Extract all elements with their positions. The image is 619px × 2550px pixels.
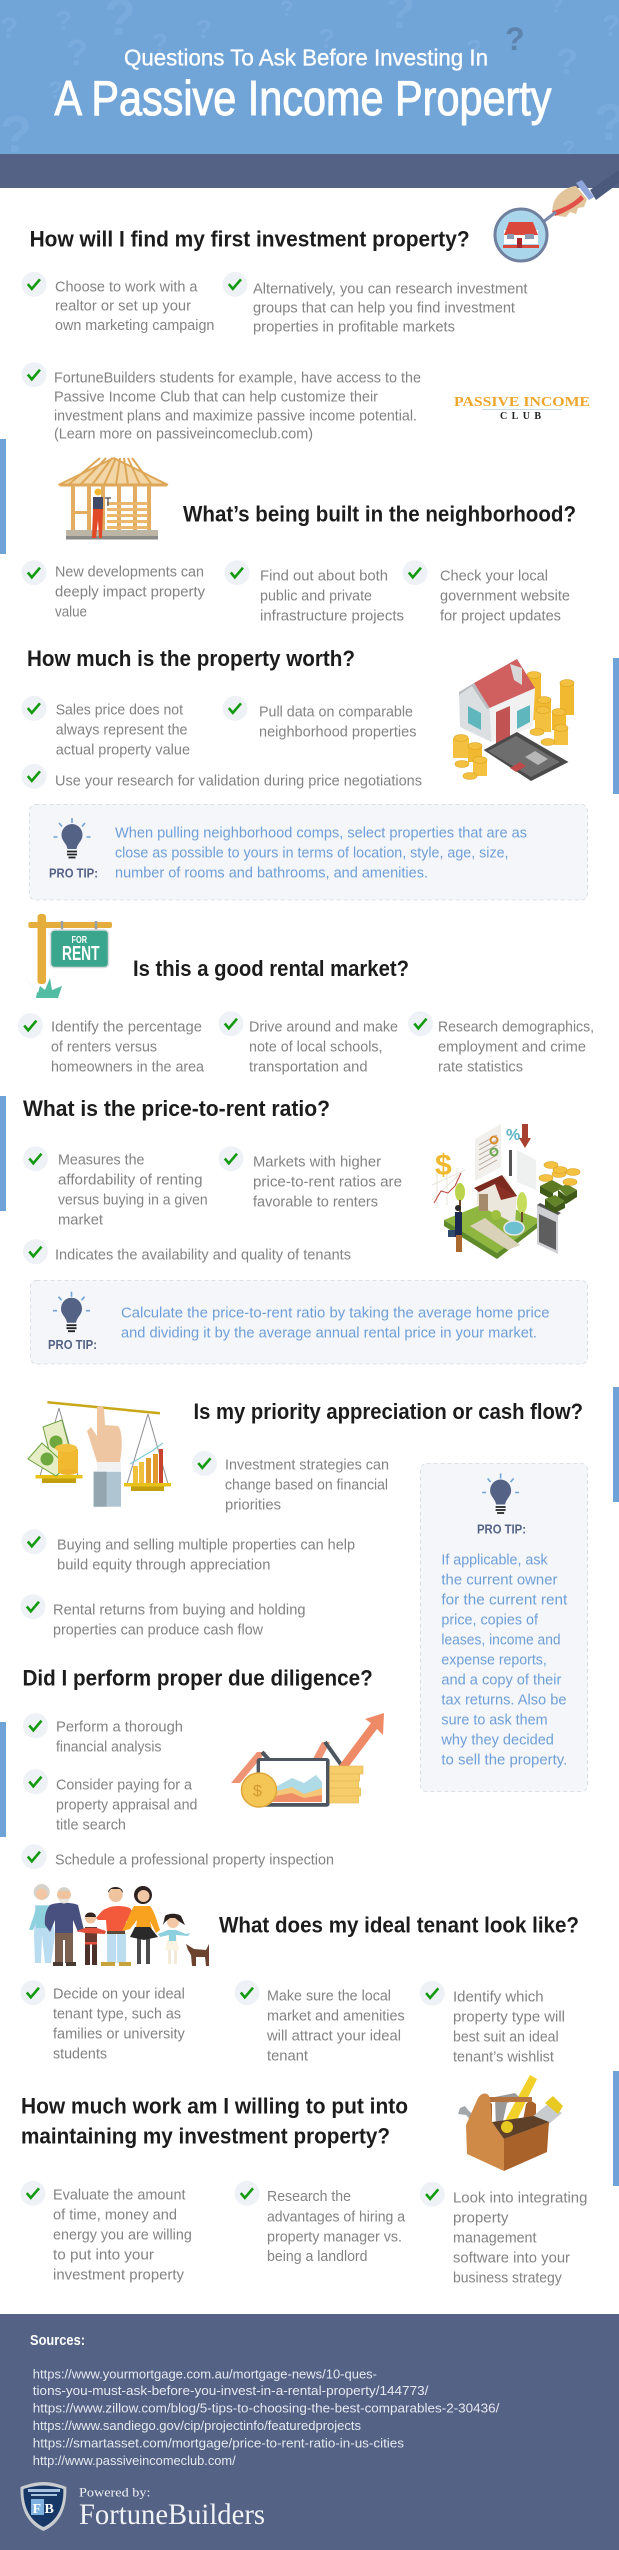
source links: https://www.yourmortgage.com.au/mortgage-news/10-ques- <box>33 2366 377 2381</box>
item: higher ratios: price-to-rent ratios are <box>253 1173 402 1190</box>
item: property manager: Research the <box>267 2188 351 2205</box>
item: strategies: priorities <box>225 1496 281 1513</box>
item: measures: Measures the <box>58 1151 144 1168</box>
title line 1: Questions To Ask Before Investing In <box>124 45 488 71</box>
item: tenant type: Decide on your ideal <box>53 1985 185 2002</box>
item: developments: New developments can <box>55 564 204 581</box>
background question marks: ? <box>152 28 168 58</box>
item: realtor: realtor or set up your <box>55 298 191 315</box>
logo: FortuneBuilders shield: F <box>32 2502 41 2517</box>
item: appraisal: title search <box>56 1816 126 1833</box>
item: financial analysis <box>23 1713 183 1755</box>
item: higher ratios <box>218 1146 402 1210</box>
logo: FortuneBuilders shield <box>20 2482 66 2531</box>
section: rental market <box>18 914 594 1076</box>
icon: scale with hand, money and chart <box>28 1402 171 1507</box>
footer panel <box>0 2314 619 2550</box>
item: property type: tenant’s wishlist <box>453 2048 555 2065</box>
icon: magnifier with hand and house <box>495 170 619 261</box>
icon: bulb <box>53 1292 90 1331</box>
icon: bulb <box>54 818 90 858</box>
item: local market <box>234 1980 405 2064</box>
background question marks: ? <box>55 5 72 36</box>
item: measures <box>23 1146 208 1228</box>
item: financial analysis: financial analysis <box>56 1738 162 1755</box>
item: measures: versus buying in a given <box>58 1191 208 1208</box>
item: demographics <box>408 1011 594 1076</box>
item: financial analysis: Perform a thorough <box>56 1718 183 1735</box>
section: property worth <box>22 646 588 900</box>
item: sales price: actual property value <box>56 742 190 759</box>
side accent bars <box>0 439 619 2186</box>
label: PRO TIP: <box>477 1521 526 1536</box>
panel: pro tip ratio <box>30 1280 588 1364</box>
item: demographics: employment and crime <box>438 1039 586 1056</box>
item: sales price <box>22 696 190 759</box>
icon: for rent sign <box>23 914 112 998</box>
item: investment groups: properties in profitable markets <box>253 319 455 336</box>
item: investment groups <box>222 272 528 336</box>
heading: What is the price-to-rent ratio? <box>23 1096 330 1121</box>
icon: house under construction <box>58 458 168 540</box>
section: ideal tenant <box>20 1884 579 2065</box>
heading: How much work am I willing to put into <box>21 2093 408 2118</box>
tip text: sure to ask them <box>441 1711 548 1728</box>
logo: Passive Income Club <box>454 394 590 422</box>
tip text: price, copies of <box>441 1611 539 1628</box>
item: tenant type <box>20 1980 185 2062</box>
item: renters percent <box>18 1013 205 1076</box>
heading: Did I perform proper due diligence? <box>22 1666 373 1691</box>
item: software: business strategy <box>453 2269 562 2286</box>
section: maintenance work <box>20 2075 587 2286</box>
item: property type <box>420 1981 565 2065</box>
item: buying and selling <box>22 1529 355 1573</box>
source links: https://www.zillow.com/blog/5-tips-to-choosing-the-best-comparables-2-30436/ <box>33 2401 500 2416</box>
icon: for rent sign: FOR <box>72 935 88 946</box>
background question marks: ? <box>318 23 335 54</box>
item: local market: tenant <box>267 2047 309 2064</box>
item: sales price: Sales price does not <box>56 701 184 718</box>
item: property manager: being a landlord <box>267 2248 368 2265</box>
item: local government <box>402 560 570 624</box>
item: time and money <box>20 2181 192 2283</box>
item: buying and selling: Buying and selling multiple properties can help <box>57 1536 355 1553</box>
item: realtor: own marketing campaign <box>55 317 214 334</box>
item: FortuneBuilders students: Passive Income Club that can help customize their <box>54 388 378 405</box>
item: drive around <box>218 1011 398 1076</box>
heading <box>21 2093 408 2148</box>
item: tenant type: students <box>53 2045 107 2062</box>
tip text <box>121 1304 550 1341</box>
item: public and private: Find out about both <box>260 567 388 584</box>
item: local market: Make sure the local <box>267 1987 391 2004</box>
item: time and money: energy you are willing <box>53 2226 192 2243</box>
logo: Passive Income Club: CLUB <box>500 411 541 422</box>
item: property manager: advantages of hiring a <box>267 2208 406 2225</box>
item: demographics: Research demographics, <box>438 1018 594 1035</box>
item: buying and selling: build equity through appreciation <box>57 1556 270 1573</box>
item: software: management <box>453 2229 537 2246</box>
tip text <box>440 1551 568 1768</box>
section: what's being built <box>22 458 576 624</box>
item: renters percent: Identify the percentage <box>51 1018 202 1035</box>
item: renters percent: of renters versus <box>51 1039 157 1056</box>
tip text: and a copy of their <box>441 1671 561 1688</box>
icon: bulb <box>482 1474 519 1513</box>
item: availability: Indicates the availability and quality of tenants <box>55 1246 351 1263</box>
background question marks: ? <box>556 41 578 82</box>
heading: Is my priority appreciation or cash flow? <box>194 1399 583 1424</box>
item: time and money: Evaluate the amount <box>53 2186 186 2203</box>
powered by: Powered by: <box>79 2485 150 2500</box>
background question marks: ? <box>562 136 575 161</box>
item: developments <box>22 560 205 621</box>
item: property type: best suit an ideal <box>453 2028 559 2045</box>
item: strategies <box>192 1451 389 1513</box>
item: inspection: Schedule a professional property inspection <box>55 1851 334 1868</box>
item: tenant type: families or university <box>53 2025 185 2042</box>
background question marks: ? <box>66 32 88 73</box>
tip text: for the current rent <box>441 1591 568 1608</box>
label: PRO TIP: <box>49 865 98 880</box>
section: first investment property <box>22 170 619 442</box>
item: software: software into your <box>453 2249 570 2266</box>
tip text: expense reports, <box>441 1651 547 1668</box>
item: FortuneBuilders students: FortuneBuilders students for example, have access to the <box>54 369 421 386</box>
icon: toolbox <box>458 2075 563 2171</box>
item: drive around: Drive around and make <box>249 1018 398 1035</box>
section: price-to-rent <box>23 1096 588 1364</box>
item: appraisal: property appraisal and <box>56 1796 197 1813</box>
background question marks: ? <box>196 14 212 44</box>
item: renters percent: homeowners in the area <box>51 1059 205 1076</box>
item: appraisal: Consider paying for a <box>56 1776 193 1793</box>
dog <box>186 1944 209 1966</box>
background question marks: ? <box>0 106 32 164</box>
item: developments: value <box>55 604 87 621</box>
item: rental returns: Rental returns from buying and holding <box>53 1601 306 1618</box>
panel: pro tip comps <box>30 804 588 900</box>
heading: maintaining my investment property? <box>21 2123 390 2148</box>
item: FortuneBuilders students <box>22 362 421 442</box>
item: measures: affordability of renting <box>58 1171 202 1188</box>
tip text: leases, income and <box>441 1631 561 1648</box>
item: strategies: Investment strategies can <box>225 1456 389 1473</box>
item: higher ratios: Markets with higher <box>253 1153 381 1170</box>
item: appraisal <box>23 1769 197 1833</box>
item: local government: for project updates <box>440 607 561 624</box>
background question marks: ? <box>466 34 482 64</box>
label: PRO TIP: <box>48 1337 97 1352</box>
icon: house, coins and calculator <box>453 659 574 781</box>
item: validation: Use your research for validation during price negotiations <box>55 772 422 789</box>
logo: FortuneBuilders shield: B <box>44 2502 54 2517</box>
item: investment groups: groups that can help you find investment <box>253 300 516 317</box>
item: local government: government website <box>440 587 570 604</box>
background question marks: ? <box>48 77 63 104</box>
item: drive around: transportation and <box>249 1059 368 1076</box>
FortuneBuilders wordmark: FortuneBuilders <box>79 2498 265 2531</box>
source links <box>33 2366 500 2468</box>
source links: http://www.passiveincomeclub.com/ <box>33 2453 236 2468</box>
item: property type: property type will <box>453 2008 565 2025</box>
item: sales price: always represent the <box>56 722 188 739</box>
item: rental returns: properties can produce cash flow <box>53 1621 263 1638</box>
item: public and private <box>224 560 404 624</box>
source links: tions-you-must-ask-before-you-invest-in-a-rental-property/144773/ <box>33 2383 429 2398</box>
item: developments: deeply impact property <box>55 584 205 601</box>
item: demographics: rate statistics <box>438 1059 523 1076</box>
tip text: the current owner <box>441 1571 558 1588</box>
item: property type: Identify which <box>453 1988 544 2005</box>
item: public and private: public and private <box>260 587 372 604</box>
tip text: close as possible to yours in terms of location, style, age, size, <box>115 844 508 861</box>
icon: isometric property scene: $ <box>435 1149 452 1182</box>
header banner <box>0 0 619 164</box>
item: realtor: Choose to work with a <box>55 279 198 296</box>
item: comparable data: Pull data on comparable <box>259 703 413 720</box>
item: property manager: property manager vs. <box>267 2228 402 2245</box>
item: validation <box>22 764 422 789</box>
item: rental returns <box>20 1594 306 1638</box>
tip text: When pulling neighborhood comps, select properties that are as <box>115 824 527 841</box>
item: local market: market and amenities <box>267 2007 405 2024</box>
item: comparable data <box>222 696 416 740</box>
icon: tablet chart, coins and arrow: $ <box>253 1783 262 1800</box>
item: availability <box>23 1239 351 1264</box>
item: software: Look into integrating <box>453 2189 587 2206</box>
icon: tablet chart, coins and arrow <box>231 1713 384 1807</box>
heading: What’s being built in the neighborhood? <box>183 502 576 527</box>
item: time and money: investment property <box>53 2266 184 2283</box>
item: public and private: infrastructure projects <box>260 607 404 624</box>
item: tenant type: tenant type, such as <box>53 2005 181 2022</box>
navy band <box>0 154 619 188</box>
logo: Passive Income Club: PASSIVE INCOME <box>454 394 590 409</box>
item: higher ratios: favorable to renters <box>253 1193 378 1210</box>
tip text: number of rooms and bathrooms, and amenities. <box>115 864 428 881</box>
heading: What does my ideal tenant look like? <box>219 1913 579 1938</box>
icon: isometric property scene <box>432 1124 580 1259</box>
tip text: tax returns. Also be <box>441 1691 566 1708</box>
tip text: If applicable, ask <box>441 1551 548 1568</box>
tip text: why they decided <box>440 1731 554 1748</box>
background question marks: ? <box>505 21 525 57</box>
item: property manager <box>234 2181 406 2265</box>
background question marks: ? <box>0 12 18 45</box>
icon: for rent sign: RENT <box>62 943 100 965</box>
background question marks <box>0 0 619 164</box>
item: strategies: change based on financial <box>225 1476 388 1493</box>
tip text: and dividing it by the average annual rental price in your market. <box>121 1324 537 1341</box>
source links: https://www.sandiego.gov/cip/projectinfo/featuredprojects <box>33 2418 361 2433</box>
item: local market: will attract your ideal <box>266 2027 401 2044</box>
sources heading: Sources: <box>30 2332 85 2349</box>
icon: isometric property scene: % <box>506 1127 520 1144</box>
item: software: property <box>453 2209 509 2226</box>
item: time and money: to put into your <box>53 2246 154 2263</box>
source links: https://smartasset.com/mortgage/price-to-rent-ratio-in-us-cities <box>33 2436 405 2451</box>
item: FortuneBuilders students: investment plans and maximize passive income potential. <box>54 408 417 425</box>
heading: How much is the property worth? <box>27 646 355 671</box>
item: comparable data: neighborhood properties <box>259 723 416 740</box>
section: due diligence <box>22 1666 384 1869</box>
item: drive around: note of local schools, <box>249 1039 382 1056</box>
item: FortuneBuilders students: (Learn more on passiveincomeclub.com) <box>54 425 313 442</box>
tip text: to sell the property. <box>441 1751 567 1768</box>
section: appreciation or cash flow <box>20 1399 588 1792</box>
item: realtor <box>22 272 214 334</box>
panel: pro tip owner <box>420 1464 588 1792</box>
item: investment groups: Alternatively, you can research investment <box>253 280 528 297</box>
item: inspection <box>22 1844 334 1869</box>
icon: family with dog <box>29 1884 209 1966</box>
tip text: Calculate the price-to-rent ratio by taking the average home price <box>121 1304 550 1321</box>
heading: How will I find my first investment property? <box>30 227 470 252</box>
item: measures: market <box>58 1211 104 1228</box>
heading: Is this a good rental market? <box>133 956 409 981</box>
tip text <box>115 824 527 881</box>
item: time and money: of time, money and <box>53 2206 177 2223</box>
item: software <box>420 2182 587 2286</box>
item: local government: Check your local <box>440 567 548 584</box>
